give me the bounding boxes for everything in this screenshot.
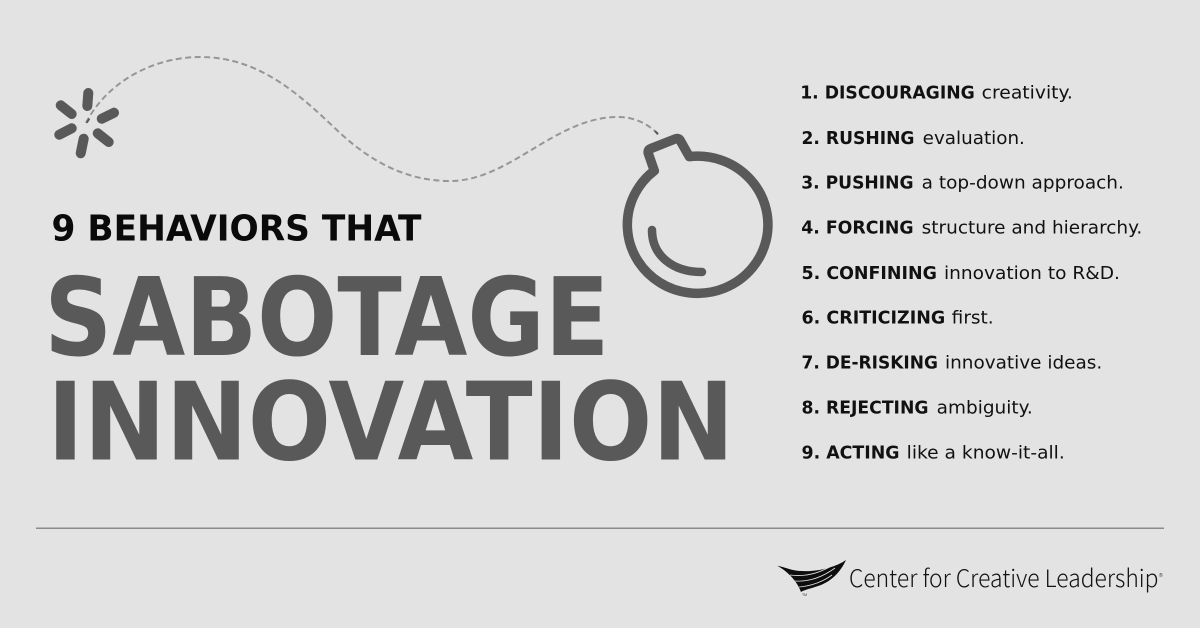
list item 3: 3. PUSHING bbox=[801, 173, 914, 194]
list item 9 bbox=[802, 442, 1065, 463]
list item 5 bbox=[802, 263, 1120, 284]
logo: Center for Creative Leadership bbox=[777, 559, 1163, 597]
list item 3 bbox=[801, 173, 1124, 194]
list item 2 bbox=[802, 128, 1025, 149]
list item 4: structure and hierarchy. bbox=[922, 217, 1142, 238]
list item 3: a top-down approach. bbox=[922, 173, 1124, 194]
list item 5: 5. CONFINING bbox=[802, 263, 937, 284]
trademark mark: TM bbox=[802, 593, 807, 597]
list item 8 bbox=[802, 397, 1033, 418]
heading: sabotage: SABOTAGE bbox=[44, 256, 609, 381]
list item 8: 8. REJECTING bbox=[802, 397, 928, 418]
list item 8: ambiguity. bbox=[937, 397, 1033, 418]
list item 1: creativity. bbox=[982, 83, 1073, 104]
list item 6: first. bbox=[952, 307, 994, 328]
list item 6: 6. CRITICIZING bbox=[802, 307, 945, 328]
list item 7 bbox=[802, 352, 1102, 373]
icon: bomb bbox=[627, 139, 768, 293]
list item 2: evaluation. bbox=[923, 128, 1025, 149]
list item 2: 2. RUSHING bbox=[802, 128, 914, 149]
list item 7: 7. DE-RISKING bbox=[802, 352, 938, 373]
dashed fuse line bbox=[86, 57, 658, 181]
list item 4: 4. FORCING bbox=[801, 217, 914, 238]
list item 7: innovative ideas. bbox=[945, 352, 1102, 373]
icon: logo wing bbox=[777, 560, 846, 592]
list item 5: innovation to R&D. bbox=[944, 263, 1120, 284]
list item 1 bbox=[800, 83, 1073, 104]
logo wordmark: Center for Creative Leadership bbox=[849, 559, 1158, 594]
list item 4 bbox=[801, 217, 1142, 238]
icon: spark burst bbox=[59, 93, 114, 153]
heading: 9 behaviors that: 9 BEHAVIORS THAT bbox=[52, 208, 422, 250]
list item 9: 9. ACTING bbox=[802, 442, 900, 463]
list item 1: 1. DISCOURAGING bbox=[800, 83, 975, 104]
heading: innovation: INNOVATION bbox=[47, 360, 734, 485]
registered mark: ® bbox=[1159, 572, 1163, 579]
list: nine behaviors bbox=[800, 83, 1142, 463]
list item 9: like a know-it-all. bbox=[907, 442, 1065, 463]
